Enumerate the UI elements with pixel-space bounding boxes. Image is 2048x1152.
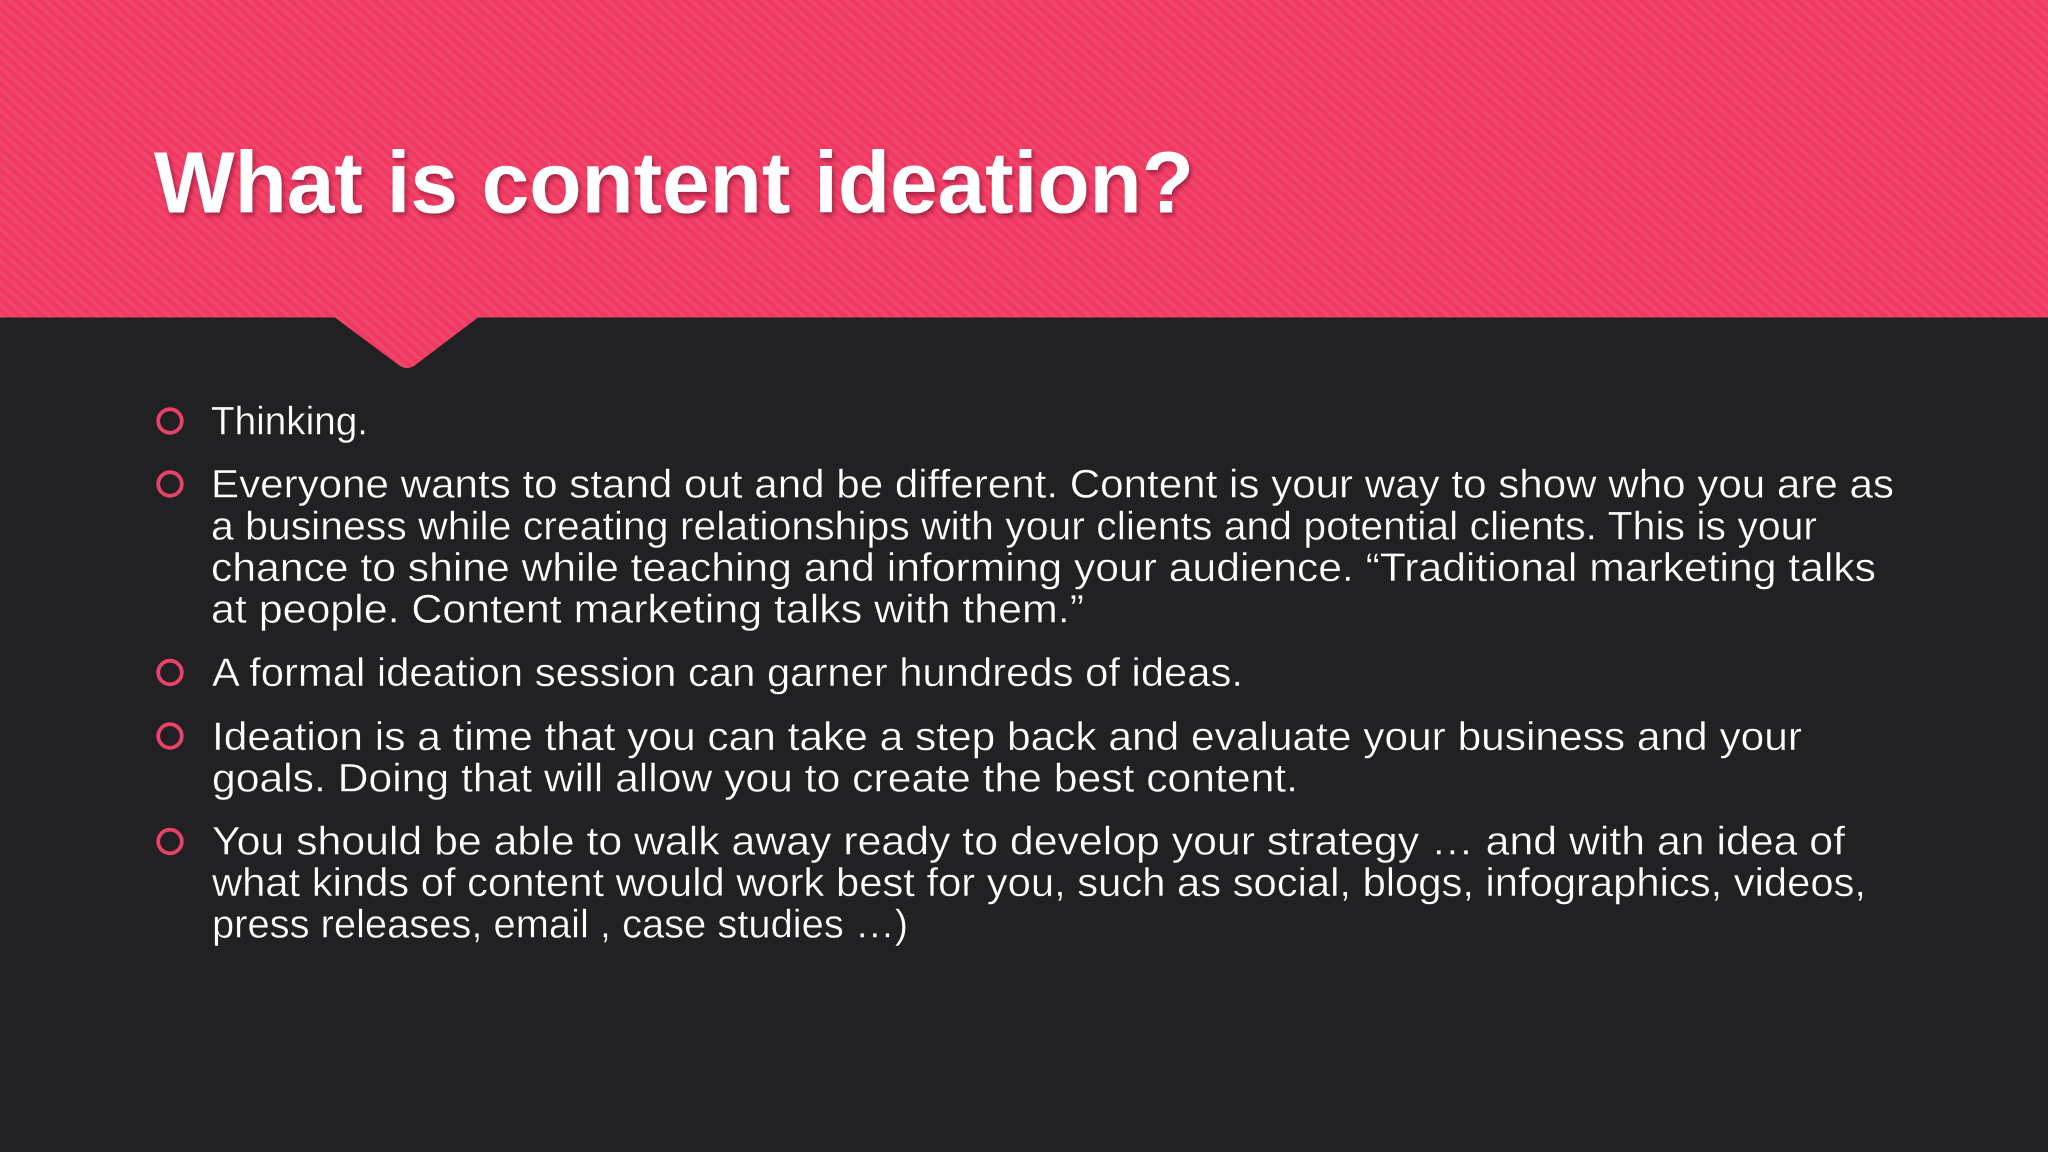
bullet list (158, 400, 1894, 946)
bullet 5: what kinds of content would work best for you, such as social, blogs, infographics, videos, (211, 861, 1866, 905)
bullet 5: You should be able to walk away ready to develop your strategy … and with an idea of (212, 820, 1846, 864)
bullet 4: goals. Doing that will allow you to create the best content. (212, 756, 1298, 800)
bullet 2: Everyone wants to stand out and be different. Content is your way to show who you are as (211, 462, 1894, 506)
bullet 4: Ideation is a time that you can take a step back and evaluate your business and your (212, 715, 1802, 759)
header banner with pointer (0, 0, 2048, 368)
title: What is content ideation? (154, 134, 1194, 232)
bullet 2: at people. Content marketing talks with them.” (211, 588, 1084, 632)
bullet 1: Thinking. (211, 400, 368, 444)
bullet 4 (158, 715, 1802, 800)
bullet 2 (158, 462, 1894, 632)
bullet 2: a business while creating relationships with your clients and potential clients. This is your (211, 504, 1817, 548)
bullet 5 (158, 820, 1866, 946)
bullet 2: chance to shine while teaching and informing your audience. “Traditional marketing talks (211, 546, 1876, 590)
bullet 5: press releases, email , case studies …) (212, 902, 908, 946)
bullet 3: A formal ideation session can garner hundreds of ideas. (212, 651, 1243, 695)
